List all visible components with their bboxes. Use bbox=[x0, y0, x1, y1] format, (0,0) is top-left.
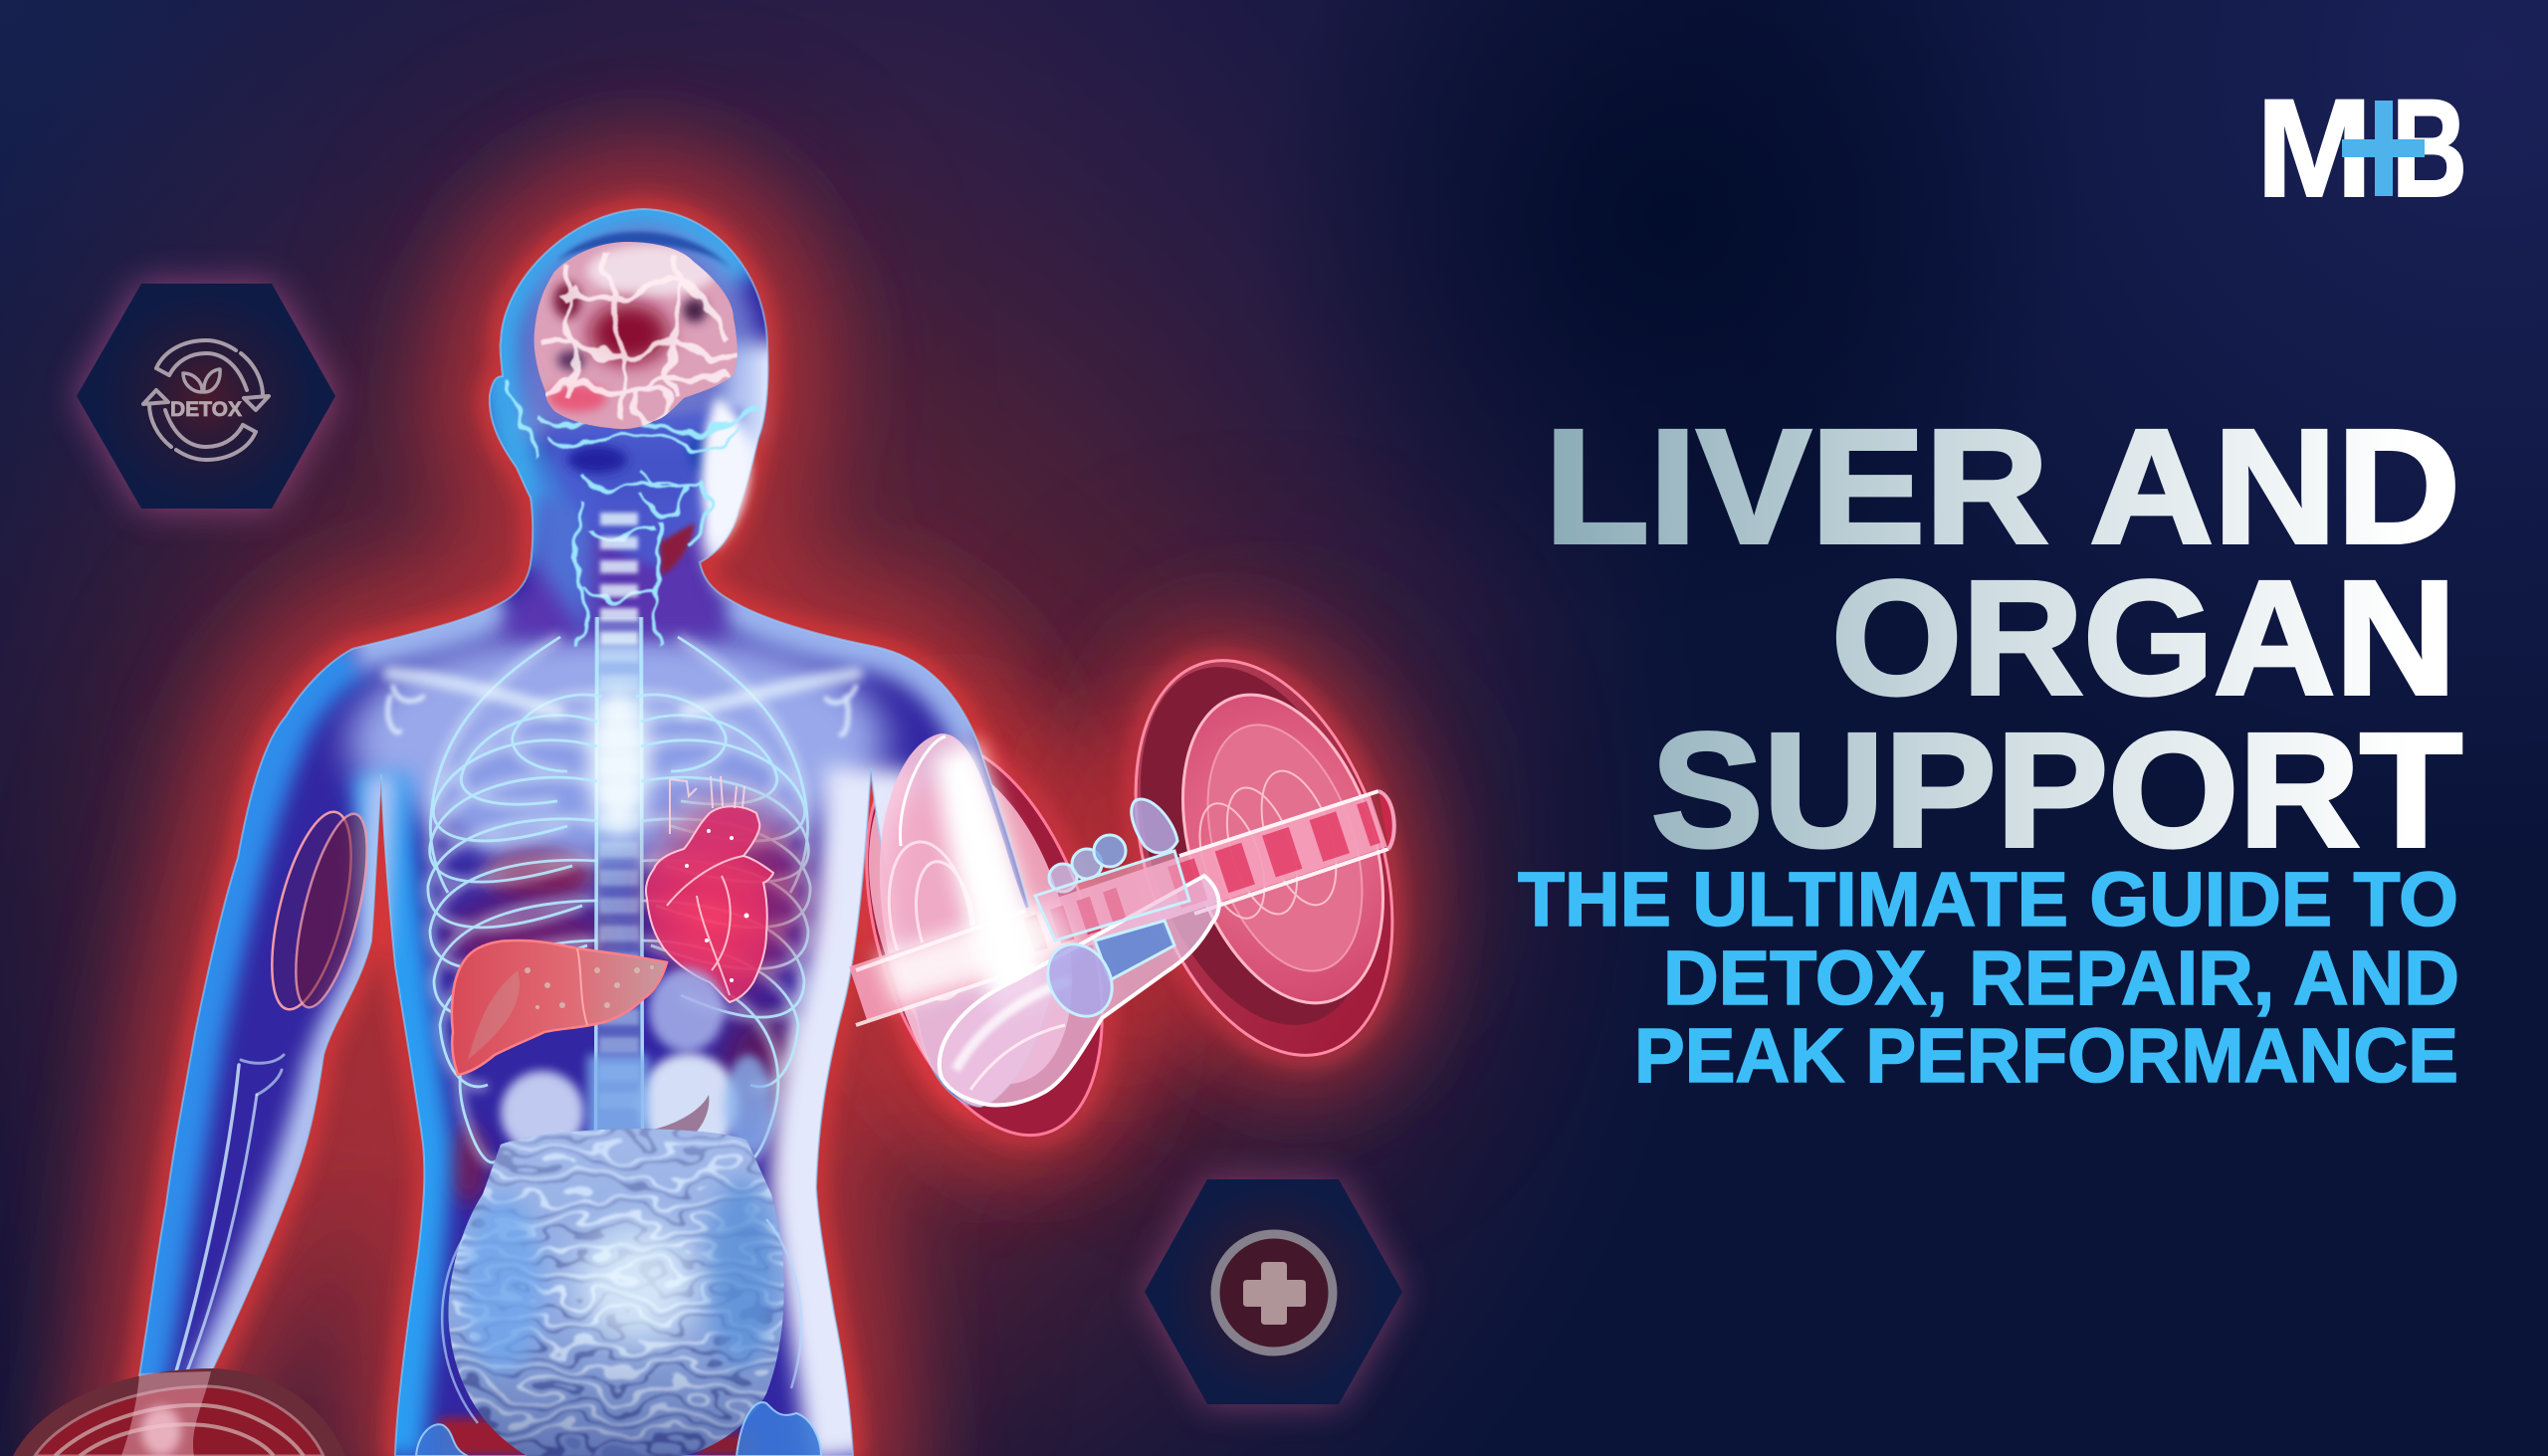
brain bbox=[534, 242, 738, 429]
detox cycle arrows and leaf bbox=[143, 340, 269, 460]
subtitle: DETOX, REPAIR, AND bbox=[1663, 936, 2459, 1021]
lavender limb rims bbox=[192, 343, 977, 1456]
far plate inner disc bbox=[1147, 669, 1419, 1029]
logo: M+B: B bbox=[2392, 70, 2467, 226]
left upper arm muscle bbox=[256, 804, 381, 1017]
clavicles bbox=[388, 674, 856, 734]
subtitle bbox=[1518, 857, 2459, 1099]
human body silhouette bbox=[122, 209, 1049, 1456]
intestines bbox=[328, 1035, 926, 1456]
belly outline bbox=[442, 1219, 801, 1423]
wrist and hand bbox=[121, 1371, 211, 1456]
logo plus bbox=[2342, 101, 2425, 196]
hand bbox=[1035, 799, 1189, 1028]
hexagon icon: medical cross bbox=[1145, 1179, 1402, 1404]
spine bbox=[589, 513, 649, 1304]
pelvis bbox=[416, 1402, 821, 1456]
abdominal organs bbox=[328, 968, 926, 1456]
dumbbell bar bbox=[856, 791, 1394, 1025]
rib cage bbox=[388, 637, 856, 1162]
title: ORGAN bbox=[1831, 546, 2456, 728]
chest and lungs shading bbox=[348, 627, 886, 856]
left arm bones bbox=[174, 1055, 284, 1378]
title: LIVER AND bbox=[1545, 395, 2460, 577]
hexagon icon: detox bbox=[77, 284, 335, 509]
white highlight on upper arm bbox=[936, 741, 1051, 1015]
upper arm pink overlay bbox=[880, 733, 1049, 1107]
detox label: DETOX bbox=[170, 397, 243, 421]
dumbbell: far plate bbox=[1089, 628, 1439, 1088]
title bbox=[1545, 395, 2462, 881]
blue limb rims bbox=[122, 209, 746, 1456]
subtitle: PEAK PERFORMANCE bbox=[1634, 1013, 2458, 1099]
title: SUPPORT bbox=[1651, 699, 2462, 881]
ring bbox=[1215, 1234, 1333, 1352]
liver bbox=[452, 940, 667, 1075]
neck shading bbox=[498, 498, 732, 637]
heart bbox=[646, 776, 804, 1002]
dumbbell: lower left bbox=[13, 1368, 345, 1456]
head: skull and face bbox=[503, 225, 758, 647]
cross bbox=[1243, 1262, 1306, 1325]
subtitle: THE ULTIMATE GUIDE TO bbox=[1518, 857, 2458, 942]
red glow around figure bbox=[122, 209, 1478, 1456]
logo: M+B: M bbox=[2256, 70, 2373, 226]
forearm bbox=[940, 876, 1219, 1105]
logo: M+B bbox=[2256, 70, 2467, 226]
stomach patch bbox=[652, 1095, 709, 1144]
dumbbell: near plate bbox=[822, 713, 1147, 1164]
right arm and dumbbell bar bbox=[856, 733, 1394, 1107]
